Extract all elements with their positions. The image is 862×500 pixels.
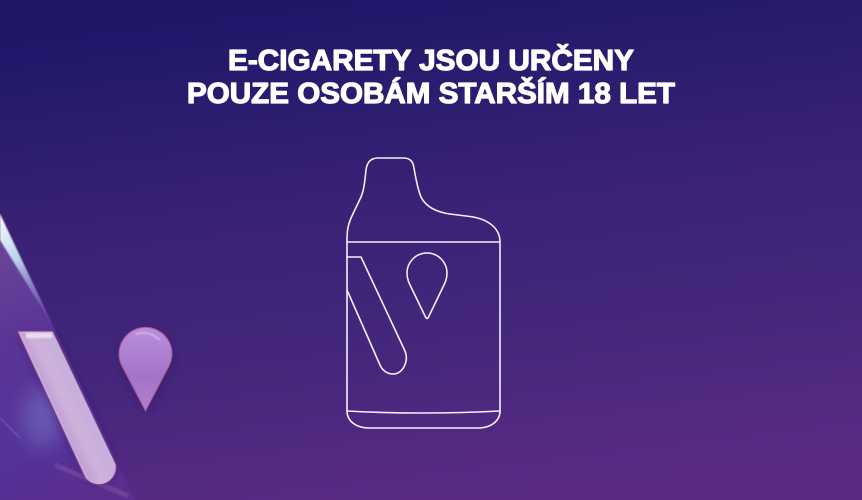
- icon: glossy bar of V logo: [17, 331, 116, 485]
- decorative glass shard: [0, 213, 135, 500]
- device base line: [347, 411, 500, 413]
- icon: glossy drop of V logo: [119, 327, 173, 414]
- device body: [347, 242, 500, 428]
- icon: disposable e-cigarette outline: [347, 158, 500, 428]
- logo drop outline: [407, 253, 447, 318]
- logo bar outline: [347, 257, 406, 374]
- title line 2: POUZE OSOBÁM STARŠÍM 18 LET: [187, 76, 675, 110]
- title line 1: E-CIGARETY JSOU URČENY: [228, 43, 634, 77]
- device mouthpiece and shoulder: [347, 158, 500, 242]
- title: [187, 43, 675, 110]
